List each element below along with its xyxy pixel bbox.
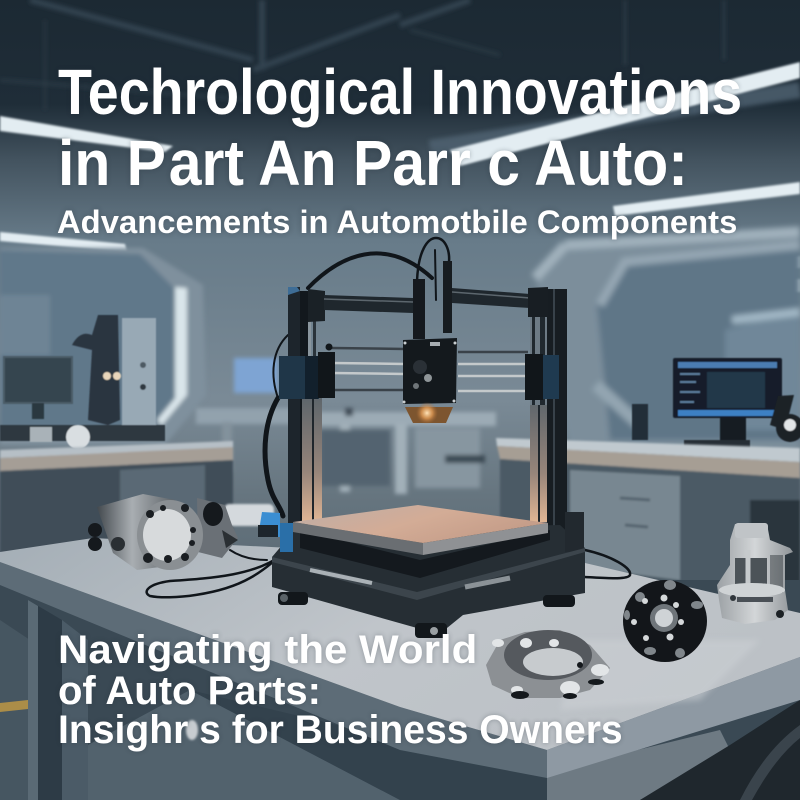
part: silver cylinder xyxy=(717,523,793,624)
right curved wall panels xyxy=(535,226,800,450)
title line 1: Techrological Innovations xyxy=(58,56,742,128)
secondary heading line 2: of Auto Parts: xyxy=(58,669,321,713)
right background monitor xyxy=(632,358,800,449)
print head xyxy=(402,261,457,424)
left background monitor and equipment xyxy=(0,315,165,449)
printer rods xyxy=(332,348,528,391)
title line 2: in Part An Parr c Auto: xyxy=(58,127,688,199)
3D printer xyxy=(147,238,630,638)
secondary heading xyxy=(58,628,623,752)
printer frame xyxy=(288,287,567,549)
right background bench xyxy=(496,438,800,630)
cables xyxy=(147,238,630,597)
foreground table xyxy=(0,538,800,800)
secondary heading line 1: Navigating the World xyxy=(58,628,477,672)
left background bench xyxy=(0,441,233,590)
part: black wheel xyxy=(623,580,707,662)
part: engine housing on left xyxy=(88,494,280,570)
secondary heading line 3: Insighr s for Business Owners xyxy=(58,708,623,752)
base and heated bed xyxy=(272,505,585,638)
subtitle: Advancements in Automotbile Components xyxy=(57,204,737,240)
printer carriage clamps xyxy=(279,344,559,400)
center background monitor and bench xyxy=(196,358,496,494)
left curved wall panel xyxy=(0,248,206,445)
ceiling lights xyxy=(0,62,800,295)
part: silver gear xyxy=(486,630,610,699)
